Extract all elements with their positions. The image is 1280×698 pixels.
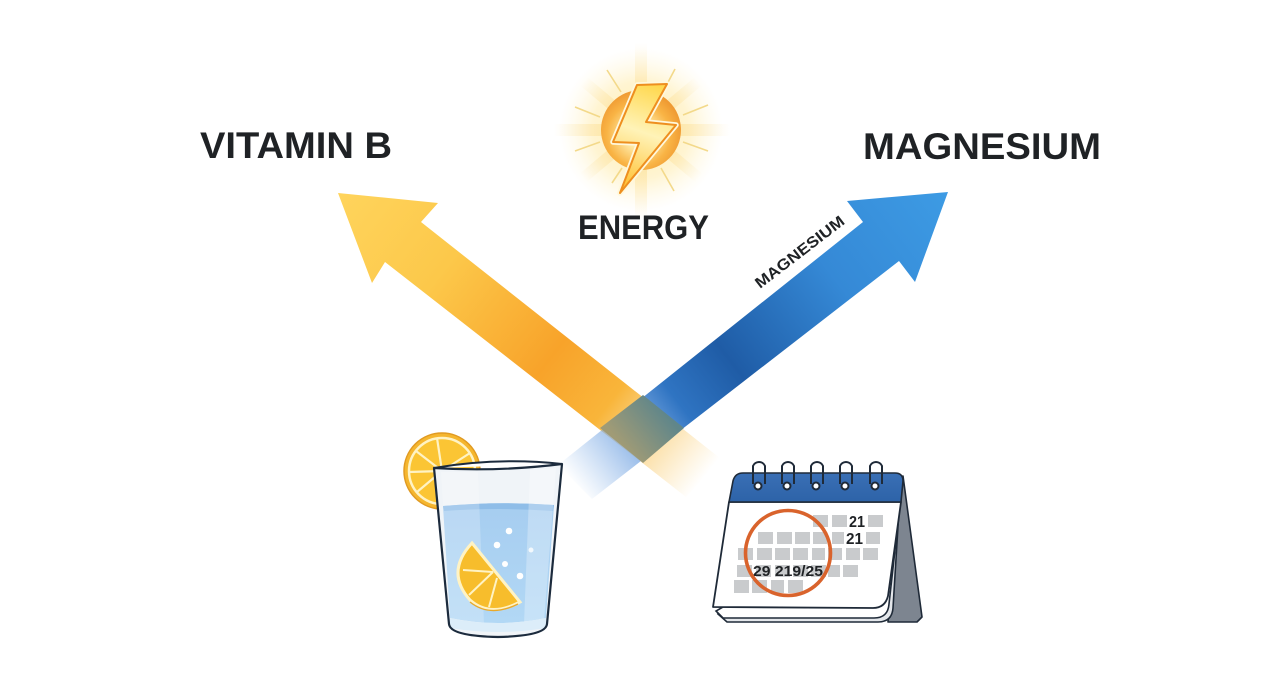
arrow: vitamin B (yellow) [338, 193, 721, 497]
blue header [729, 473, 903, 502]
red circle marking dates [746, 510, 830, 596]
date numbers: 21 [849, 514, 865, 531]
lemon slice on rim [404, 433, 480, 509]
water [443, 503, 554, 623]
heading: Vitamin B: VITAMIN B [200, 125, 392, 166]
glass body [434, 464, 562, 637]
date numbers: 21 [846, 531, 863, 548]
icon: desk calendar with circled date [713, 462, 922, 622]
glass highlights [441, 472, 484, 624]
calendar stand [888, 476, 922, 622]
heading: Magnesium: MAGNESIUM [863, 126, 1101, 167]
back pages [718, 510, 899, 622]
binding rings [753, 462, 882, 490]
icon: glass of lemon water [404, 433, 562, 637]
icon: energy sun with lightning bolt [554, 43, 730, 219]
bubbles [494, 528, 534, 579]
arrow: magnesium (blue) [558, 192, 948, 499]
glass outline [434, 464, 562, 637]
arrow crossing overlap [600, 395, 684, 463]
arrow label: magnesium: MAGNESIUM [752, 213, 848, 292]
front page [713, 502, 901, 608]
date numbers: 29 219/25 [753, 563, 823, 580]
date numbers [753, 514, 865, 580]
lemon wedge [458, 543, 520, 611]
heading: Energy: ENERGY [578, 209, 709, 247]
glass back rim [434, 461, 562, 468]
date grid [734, 515, 883, 593]
